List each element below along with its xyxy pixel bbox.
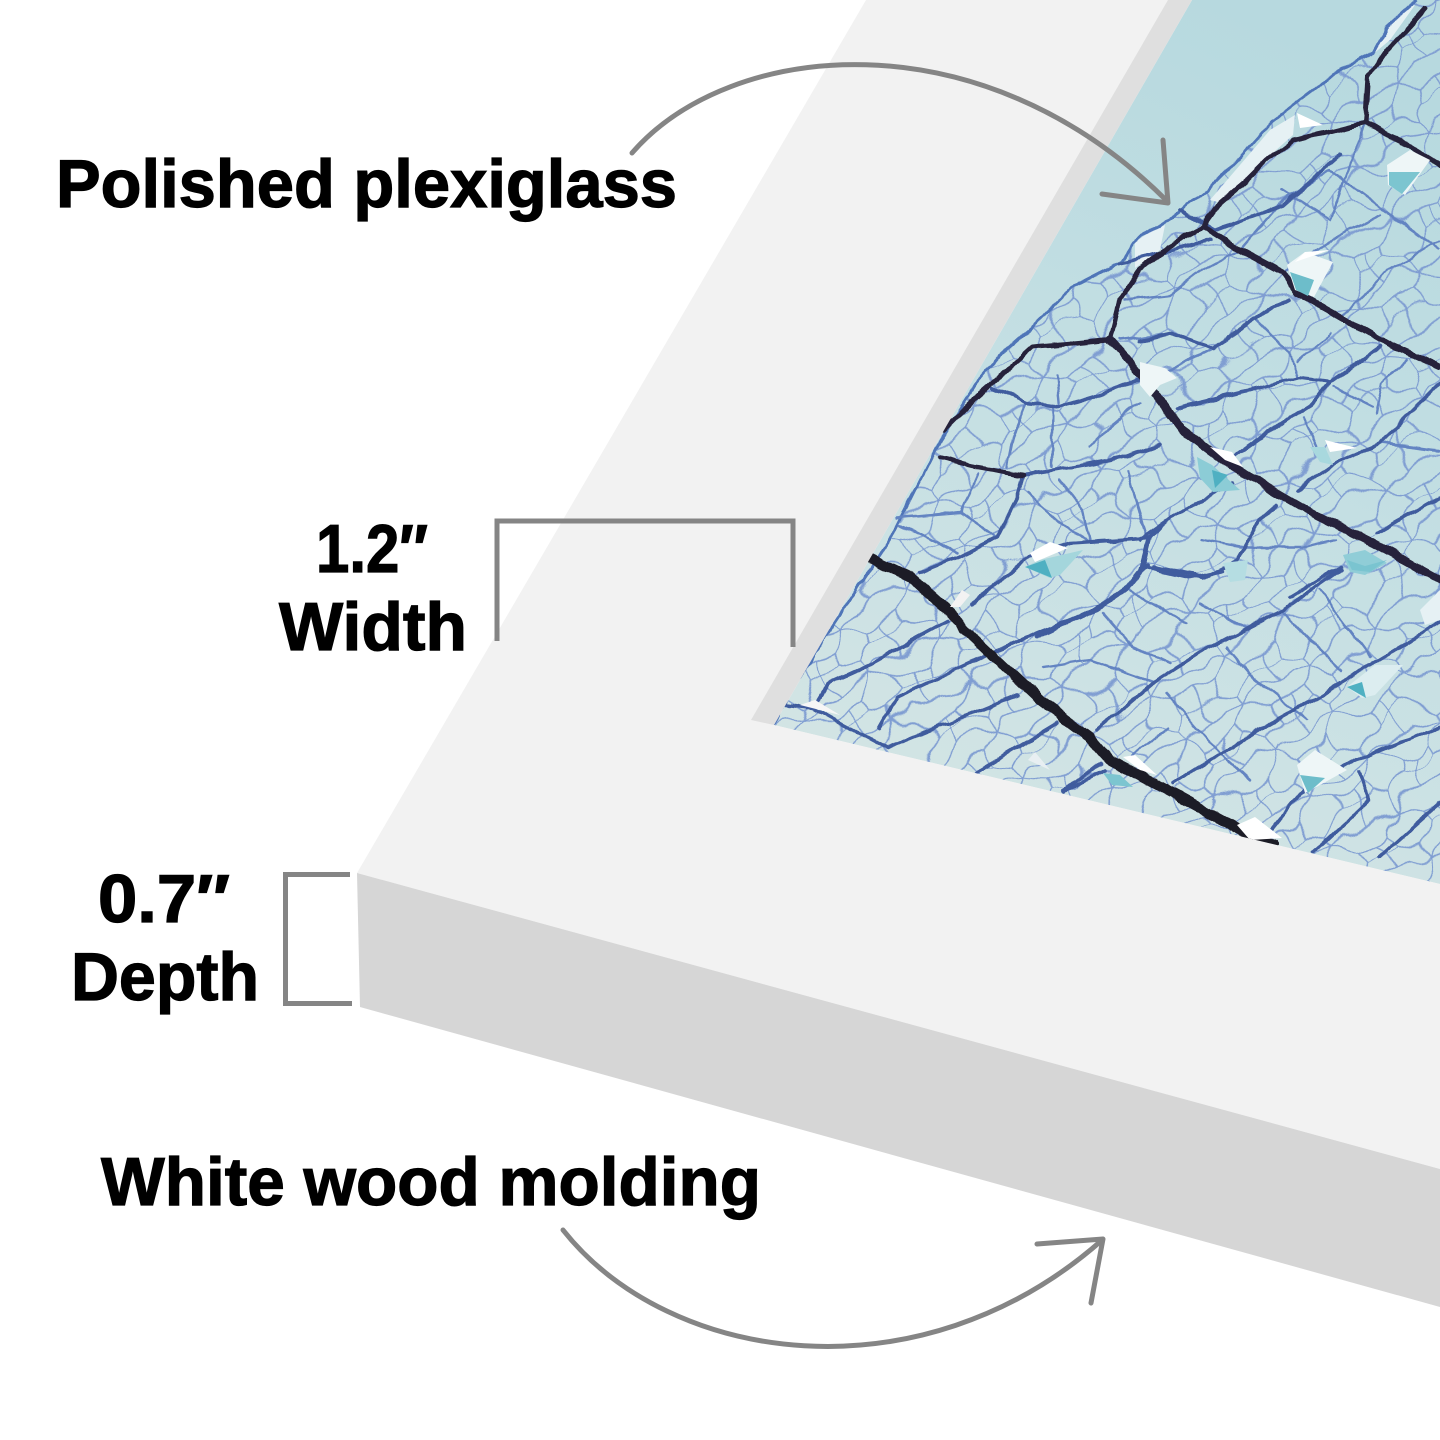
pale cells along the leaf margin bbox=[1135, 5, 1415, 268]
vein system bbox=[774, 0, 1440, 857]
frame side face bbox=[357, 873, 1440, 1307]
label: width: Width bbox=[279, 589, 467, 665]
water droplets bbox=[800, 113, 1440, 840]
label: depth value: 0.7″ bbox=[98, 861, 230, 937]
label: white wood molding: White wood molding bbox=[101, 1144, 761, 1220]
leaf outline veins bbox=[774, 0, 1417, 725]
bracket: depth bbox=[286, 874, 352, 1004]
artwork background bbox=[774, 0, 1440, 884]
arrow: white wood molding bbox=[563, 1230, 1103, 1346]
frame molding bbox=[357, 0, 1440, 1307]
medium blue veins bbox=[785, 155, 1440, 857]
bracket: width bbox=[497, 521, 793, 647]
leaf artwork bbox=[774, 0, 1440, 884]
arrow: polished plexiglass bbox=[632, 65, 1168, 203]
plexiglass bevel bbox=[751, 0, 1192, 725]
label: depth: Depth bbox=[71, 939, 259, 1015]
thin blue veins bbox=[897, 123, 1440, 800]
label: polished plexiglass: Polished plexiglass bbox=[56, 146, 677, 222]
dark main veins bbox=[870, 8, 1440, 845]
label: width value: 1.2″ bbox=[316, 511, 428, 587]
leaf fine vein network bbox=[774, 0, 1440, 882]
frame top face bbox=[357, 0, 1440, 1169]
